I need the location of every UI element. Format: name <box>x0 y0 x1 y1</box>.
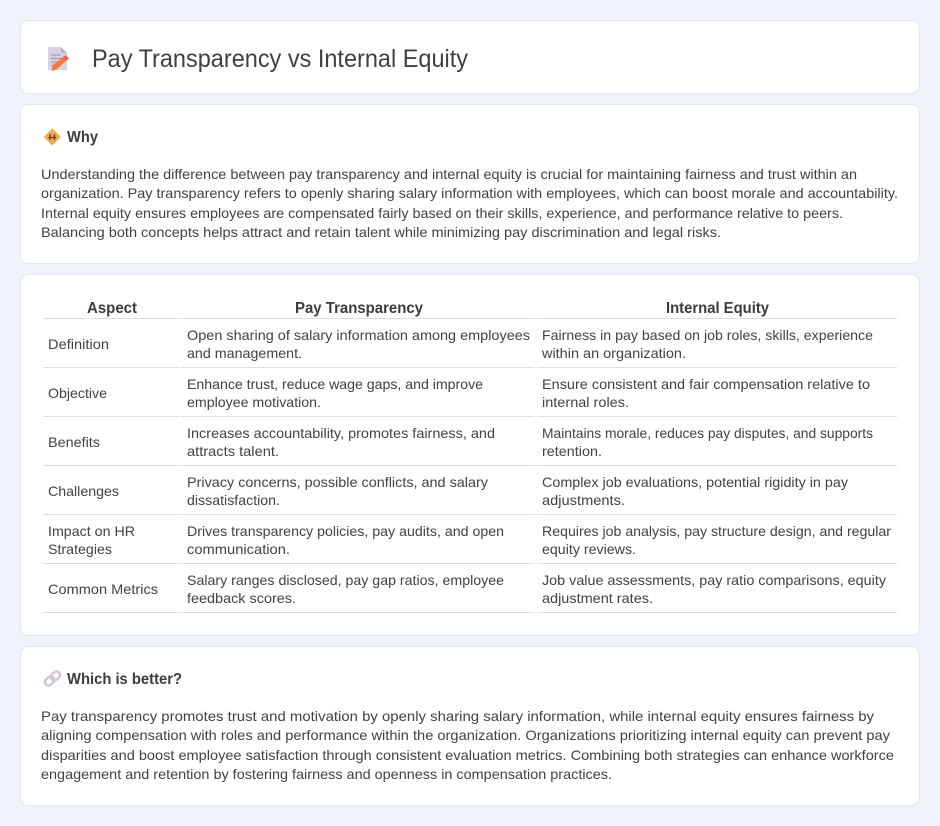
title: Pay Transparency vs Internal Equity <box>92 45 468 73</box>
table header: Pay Transparency <box>295 300 423 317</box>
text block: why: Understanding the difference between pay transparency and internal equity is crucial for maintaining fairness and trust within an <box>41 166 857 182</box>
row: challenges: Complex job evaluations, potential rigidity in pay <box>542 474 848 490</box>
row: benefits: Increases accountability, promotes fairness, and <box>187 425 495 441</box>
row: benefits: Benefits <box>48 434 100 450</box>
row: impact on hr strategies: Drives transparency policies, pay audits, and open <box>187 523 504 539</box>
row: objective: internal roles. <box>542 394 629 410</box>
row: definition: Definition <box>48 336 109 352</box>
row: objective <box>48 376 870 410</box>
row: common metrics <box>48 572 886 606</box>
panel: comparison table <box>20 274 920 636</box>
heading: which is better: Which is better? <box>67 671 182 688</box>
row: benefits: retention. <box>542 443 602 459</box>
text block: which is better: engagement and retention by fostering fairness and openness in compensation practices. <box>41 766 612 782</box>
row: impact on hr strategies: Strategies <box>48 541 112 557</box>
row: challenges: Challenges <box>48 483 119 499</box>
row: common metrics: Salary ranges disclosed, pay gap ratios, employee <box>187 572 504 588</box>
panel: which is better <box>20 646 920 806</box>
row: benefits: attracts talent. <box>187 443 279 459</box>
icon: chain link <box>43 670 62 687</box>
table header <box>87 300 769 317</box>
row: impact on hr strategies: equity reviews. <box>542 541 636 557</box>
row: definition: within an organization. <box>541 345 686 361</box>
row: common metrics: Common Metrics <box>48 581 158 597</box>
text block: why: Internal equity ensures employees are compensated fairly based on their skills, experience, and performance relative to peers. <box>41 205 843 221</box>
table header: Aspect <box>87 300 138 317</box>
row: objective: employee motivation. <box>187 394 321 410</box>
row: definition: and management. <box>187 345 302 361</box>
row: objective: Objective <box>48 385 107 401</box>
row: benefits: Maintains morale, reduces pay disputes, and supports <box>542 425 873 441</box>
text block: which is better <box>41 708 894 782</box>
row: definition <box>48 327 873 361</box>
text block: which is better: disparities and boost employee satisfaction through consistent evaluation metrics. Combining both strategies can enhance workforce <box>41 747 894 763</box>
text block: why <box>41 166 898 240</box>
panel: why <box>20 104 920 264</box>
row: common metrics: Job value assessments, pay ratio comparisons, equity <box>542 572 886 588</box>
icon: diamond sign <box>45 130 60 144</box>
row: impact on hr strategies <box>48 523 891 557</box>
text block: why: Balancing both concepts helps attract and retain talent while minimizing pay discrimination and legal risks. <box>41 224 721 240</box>
row: impact on hr strategies: Impact on HR <box>48 523 135 539</box>
row: definition: Open sharing of salary information among employees <box>187 327 530 343</box>
row: challenges: Privacy concerns, possible conflicts, and salary <box>187 474 488 490</box>
heading: why: Why <box>67 129 98 146</box>
row: impact on hr strategies: Requires job analysis, pay structure design, and regular <box>542 523 891 539</box>
row: common metrics: adjustment rates. <box>542 590 653 606</box>
row: objective: Ensure consistent and fair compensation relative to <box>542 376 870 392</box>
text block: which is better: Pay transparency promotes trust and motivation by openly sharing salary information, while internal equity ensures fairness by <box>41 708 874 724</box>
row: benefits <box>48 425 873 459</box>
row: objective: Enhance trust, reduce wage gaps, and improve <box>187 376 483 392</box>
row: challenges: dissatisfaction. <box>187 492 280 508</box>
text block: why: organization. Pay transparency refers to openly sharing salary information with employees, which can boost morale and accountability. <box>41 185 898 201</box>
panel: header <box>20 20 920 94</box>
row: common metrics: feedback scores. <box>187 590 296 606</box>
row: impact on hr strategies: communication. <box>187 541 290 557</box>
text block: which is better: aligning compensation with roles and performance within the organization. Organizations prioritizing internal equity can prevent pay <box>41 727 890 743</box>
table header: Internal Equity <box>666 300 769 317</box>
row: challenges: adjustments. <box>542 492 625 508</box>
row: definition: Fairness in pay based on job roles, skills, experience <box>542 327 873 343</box>
icon: document with pencil <box>48 47 69 71</box>
row: challenges <box>48 474 848 508</box>
